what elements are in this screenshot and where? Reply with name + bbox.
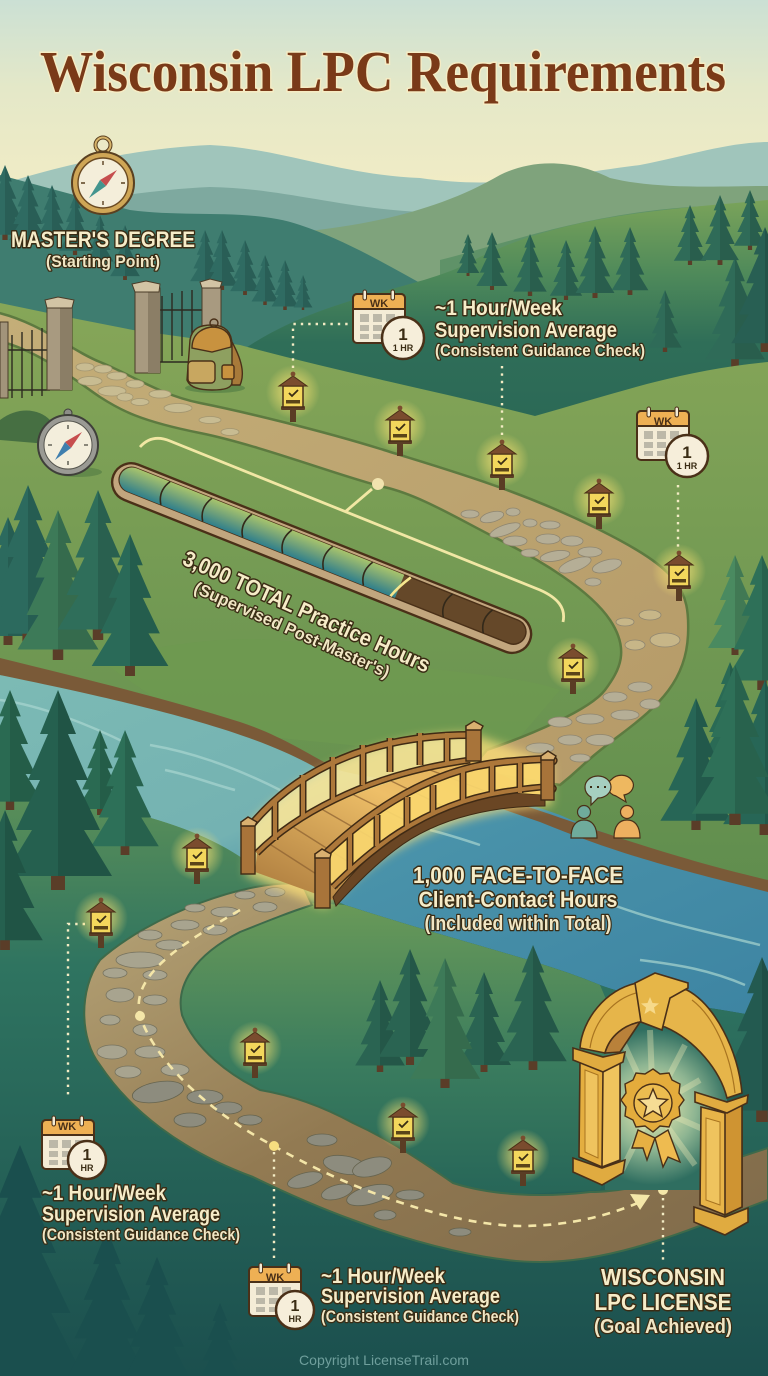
right column <box>700 1105 742 1215</box>
dashed trail with arrow <box>135 910 668 1226</box>
dark forested slope <box>0 165 470 380</box>
front rail panels <box>322 762 548 887</box>
icon: gold rosette <box>621 1069 684 1167</box>
bridge posts <box>241 721 556 908</box>
far right pine near arch <box>717 957 768 1122</box>
calendar: top supervision: WK <box>370 298 388 310</box>
icon: silver compass <box>0 409 102 477</box>
river <box>0 658 768 1018</box>
front rail <box>322 759 554 887</box>
bar label: (Supervised Post-Master's) <box>191 578 393 682</box>
dotted connectors <box>68 324 678 1262</box>
label: master's degree <box>11 227 195 271</box>
label: lower left supervision: Supervision Average <box>42 1203 220 1226</box>
distant mountains <box>0 142 768 340</box>
left column <box>579 1060 620 1167</box>
golden arch <box>573 973 748 1235</box>
calendar: lower left supervision <box>42 1116 106 1179</box>
label: bottom supervision: (Consistent Guidance Check) <box>321 1307 519 1326</box>
label: face-to-face hours: Client-Contact Hours <box>418 887 618 912</box>
central meadow and right hill <box>0 303 768 900</box>
arch curve <box>580 983 742 1098</box>
calendar: right supervision: 1 HR <box>677 461 698 471</box>
label: bottom supervision: Supervision Average <box>321 1285 500 1308</box>
calendar: right supervision: 1 <box>682 443 692 462</box>
under arch <box>333 792 545 906</box>
label: wisconsin lpc license: (Goal Achieved) <box>594 1316 732 1338</box>
calendar: right supervision <box>637 407 708 477</box>
calendar: top supervision: 1 HR <box>393 343 414 353</box>
bar label: 3,000 TOTAL Practice Hours <box>179 546 434 677</box>
label: face-to-face hours: (Included within Total) <box>424 913 612 935</box>
label: face-to-face hours: 1,000 FACE-TO-FACE <box>413 862 623 888</box>
island pine trees <box>355 945 567 1088</box>
backpack icon <box>185 319 245 393</box>
keystone <box>635 973 688 1030</box>
bridge glow <box>245 733 552 908</box>
label: wisconsin lpc license: WISCONSIN <box>601 1264 725 1290</box>
calendar: bottom supervision <box>249 1263 314 1329</box>
meadow hump <box>100 639 560 760</box>
copyright: Copyright LicenseTrail.com <box>299 1352 469 1368</box>
bridge deck <box>255 760 545 900</box>
label: bottom supervision: ~1 Hour/Week <box>321 1265 445 1288</box>
label: top supervision: ~1 Hour/Week <box>435 297 562 320</box>
calendar: top supervision: 1 <box>398 325 408 344</box>
right pine trees <box>660 555 768 835</box>
calendar: right supervision: WK <box>654 416 672 428</box>
left pine trees <box>0 485 168 676</box>
progress bracket <box>140 438 564 622</box>
label: wisconsin lpc license: LPC LICENSE <box>594 1289 732 1315</box>
river bank pine trees <box>0 690 159 950</box>
label: face-to-face hours <box>413 862 623 935</box>
foreground silhouette pines <box>0 1145 242 1376</box>
label: wisconsin lpc license <box>594 1264 732 1338</box>
deck planks <box>268 768 490 888</box>
label: lower left supervision: (Consistent Guidance Check) <box>42 1225 240 1244</box>
label: top supervision <box>435 297 645 360</box>
back rail panels <box>253 733 470 853</box>
icon: conversation <box>571 775 640 838</box>
label: top supervision: Supervision Average <box>435 319 617 342</box>
lantern markers <box>74 365 706 1186</box>
calendar: top supervision <box>353 290 424 359</box>
lower ground and island <box>0 790 768 1376</box>
calendar: lower left supervision: WK <box>58 1121 76 1133</box>
label: bottom supervision <box>321 1265 519 1326</box>
arch interior rays <box>605 1026 727 1190</box>
glowing bridge <box>241 721 556 908</box>
label: master's degree: MASTER'S DEGREE <box>11 227 195 252</box>
background sky <box>0 0 768 220</box>
calendar: bottom supervision: HR <box>288 1314 302 1324</box>
calendar: bottom supervision: WK <box>266 1272 284 1284</box>
lower cobblestone road <box>84 883 768 1262</box>
icon: gold compass <box>72 138 134 214</box>
back rail <box>253 733 470 853</box>
upper right hill with pines <box>240 190 768 430</box>
stone gate with iron fence <box>0 279 222 398</box>
label: lower left supervision: ~1 Hour/Week <box>42 1182 166 1205</box>
label: lower left supervision <box>42 1182 240 1244</box>
label: master's degree: (Starting Point) <box>46 252 160 271</box>
calendar: lower left supervision: HR <box>80 1163 94 1173</box>
title: Wisconsin LPC Requirements <box>40 39 726 104</box>
progress bar: 3000 total hours <box>106 458 537 659</box>
calendar: bottom supervision: 1 <box>291 1298 300 1315</box>
label: top supervision: (Consistent Guidance Check) <box>435 341 645 360</box>
calendar: lower left supervision: 1 <box>83 1147 92 1164</box>
upper cobblestone road <box>0 312 688 785</box>
